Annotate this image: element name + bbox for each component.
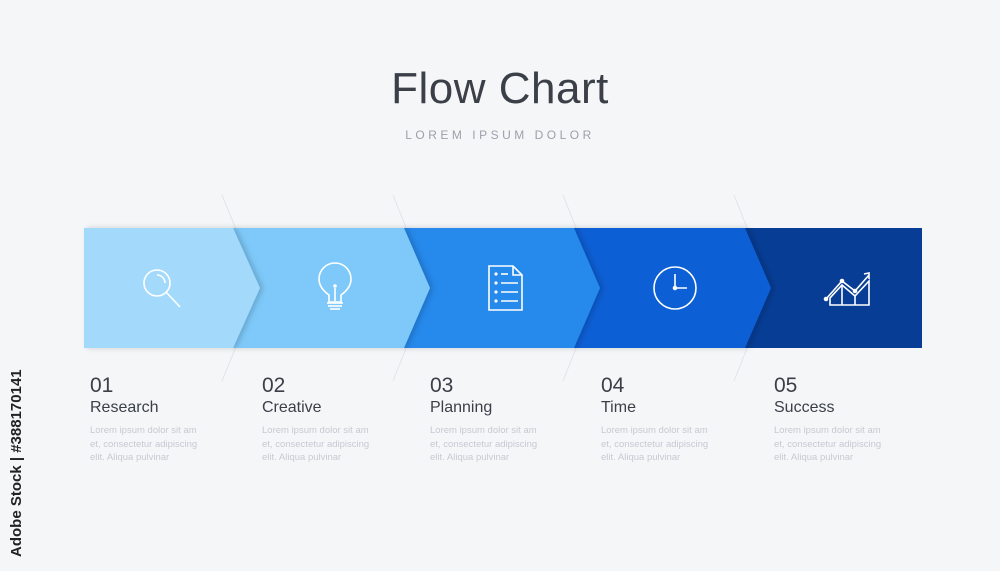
step 02 text: 02 [262, 374, 285, 397]
step 02 text [262, 374, 369, 463]
step 05 text: et, consectetur adipiscing [774, 438, 881, 450]
text: Adobe Stock | #388170141 [8, 369, 25, 557]
step 05 text: Lorem ipsum dolor sit am [774, 425, 881, 436]
step 04 text [601, 374, 708, 463]
step 05 text: 05 [774, 374, 797, 397]
step 03 text: Planning [430, 399, 492, 416]
step 01 text: et, consectetur adipiscing [90, 438, 197, 450]
step 05 text [774, 374, 881, 463]
title: Flow Chart [391, 64, 609, 113]
step 02 text: Creative [262, 399, 322, 416]
step 01 text: Lorem ipsum dolor sit am [90, 425, 197, 436]
step 01 text: elit. Aliqua pulvinar [90, 452, 169, 463]
segment 2 [233, 228, 430, 348]
icon: magnifier [144, 270, 180, 307]
step 04 text: Lorem ipsum dolor sit am [601, 425, 708, 436]
step 02 text: Lorem ipsum dolor sit am [262, 425, 369, 436]
step 03 text [430, 374, 537, 463]
step 03 text: et, consectetur adipiscing [430, 438, 537, 450]
step 03 text: 03 [430, 374, 453, 397]
icon: document list [489, 266, 522, 310]
segment 3 [404, 228, 600, 348]
icon: light bulb [319, 263, 351, 309]
segment 1 [84, 228, 260, 348]
step 01 text [90, 374, 197, 463]
segment 4 [574, 228, 771, 348]
icon: clock [654, 267, 696, 309]
step 02 text: et, consectetur adipiscing [262, 438, 369, 450]
step 01 text: Research [90, 399, 158, 416]
step 04 text: 04 [601, 374, 624, 397]
icon: chart [824, 273, 869, 305]
step 04 text: elit. Aliqua pulvinar [601, 452, 680, 463]
step 05 text: elit. Aliqua pulvinar [774, 452, 853, 463]
step 03 text: elit. Aliqua pulvinar [430, 452, 509, 463]
segment 5 [745, 228, 922, 348]
step 05 text: Success [774, 399, 834, 416]
subtitle: LOREM IPSUM DOLOR [405, 128, 595, 142]
step 03 text: Lorem ipsum dolor sit am [430, 425, 537, 436]
step 04 text: Time [601, 399, 636, 416]
step 01 text: 01 [90, 374, 113, 397]
step 04 text: et, consectetur adipiscing [601, 438, 708, 450]
step 02 text: elit. Aliqua pulvinar [262, 452, 341, 463]
